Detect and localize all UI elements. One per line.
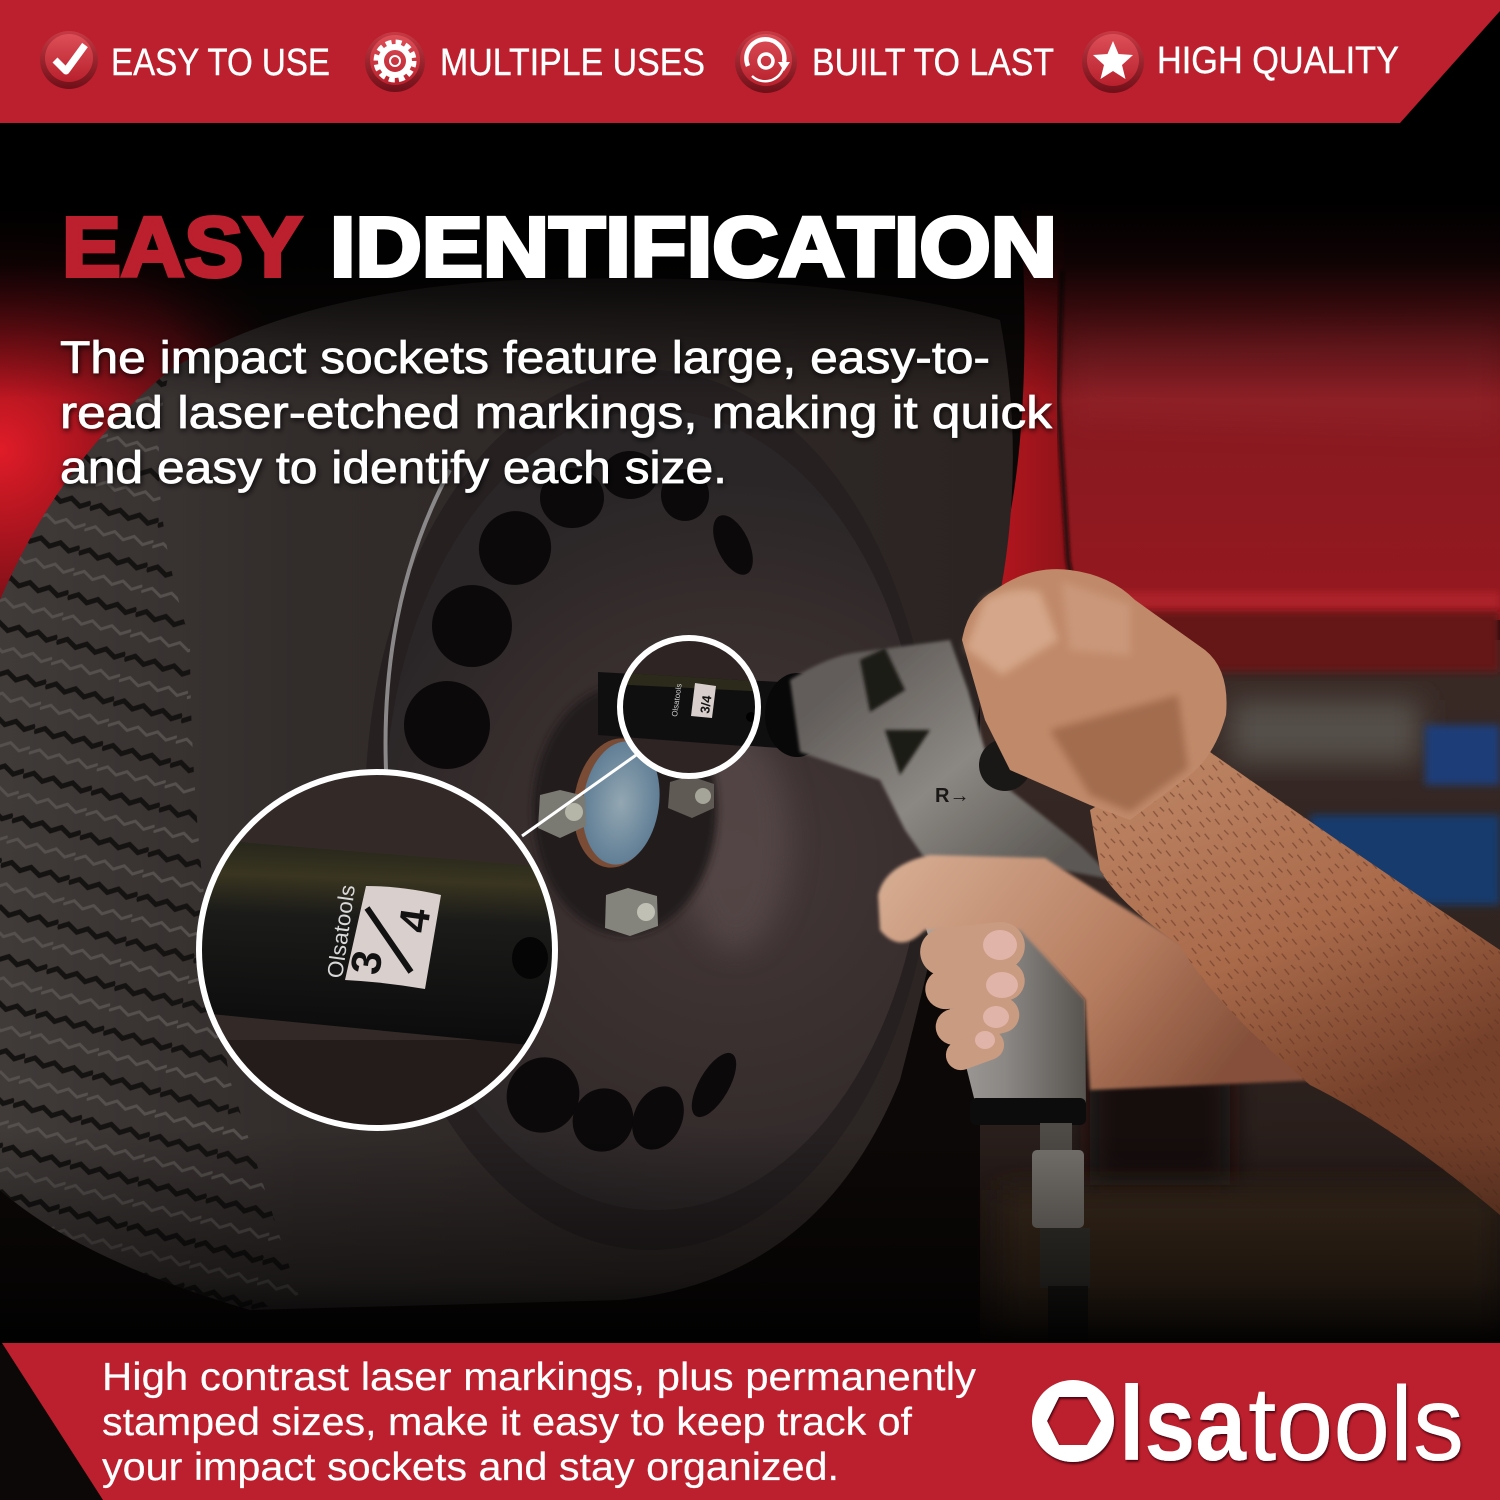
icon: check mark xyxy=(40,31,98,89)
intro paragraph: The impact sockets feature large, easy-to- xyxy=(60,332,990,383)
icon: gear with circular arrow xyxy=(735,31,797,93)
footer text: your impact sockets and stay organized. xyxy=(102,1446,839,1489)
benefit: high quality xyxy=(1082,31,1399,93)
red car body xyxy=(990,200,1500,672)
steel wheel xyxy=(365,370,935,1250)
footer text: stamped sizes, make it easy to keep track of xyxy=(102,1401,912,1444)
large size number 4: 4 xyxy=(389,905,439,935)
large magnifier lens: socket marking xyxy=(196,769,558,1131)
panel: bottom band xyxy=(2,1343,1500,1500)
logo: Olsatools xyxy=(1032,1365,1464,1483)
connector line xyxy=(522,753,639,836)
air fitting xyxy=(1040,1123,1072,1153)
logo: Olsatools: lsa xyxy=(1119,1365,1247,1483)
wrench body xyxy=(790,640,1115,880)
socket on the wheel xyxy=(598,672,780,748)
bottom dark overlay xyxy=(0,1130,1500,1345)
brand label: Olsatools xyxy=(670,683,684,717)
small lens: socket marking xyxy=(610,638,770,776)
lug nuts xyxy=(538,776,714,936)
heading word: identification: IDENTIFICATION xyxy=(330,200,1057,294)
R arrow marking: R→ xyxy=(935,785,969,807)
background: left red fender glow xyxy=(0,150,300,750)
benefit: easy to use xyxy=(40,31,330,89)
background: garage behind the car xyxy=(980,640,1500,1350)
benefit label: EASY TO USE xyxy=(111,42,330,84)
benefit label: MULTIPLE USES xyxy=(440,42,705,84)
size label: 3/4 xyxy=(697,694,715,714)
benefit label: BUILT TO LAST xyxy=(812,42,1054,84)
panel: top benefits band xyxy=(0,0,1500,123)
fingers xyxy=(918,920,1027,1074)
intro paragraph: read laser-etched markings, making it quick xyxy=(60,387,1053,438)
icon: star xyxy=(1082,31,1144,93)
impact wrench xyxy=(598,640,1115,1342)
wheel hub recess xyxy=(533,685,717,935)
benefit label: HIGH QUALITY xyxy=(1157,40,1399,82)
footer text xyxy=(102,1356,977,1489)
intro paragraph xyxy=(60,332,1053,493)
tire tread xyxy=(0,370,300,1310)
socket tube xyxy=(190,838,560,1048)
size marking plate xyxy=(345,886,441,989)
lower arm and gripping hand xyxy=(878,855,1320,1090)
wrench handle xyxy=(925,925,1086,1110)
lens lower area xyxy=(227,1040,524,1125)
footer text: High contrast laser markings, plus permanently xyxy=(102,1356,977,1399)
benefit: built to last xyxy=(735,31,1054,93)
intro paragraph: and easy to identify each size. xyxy=(60,442,727,493)
icon: gear xyxy=(365,32,425,92)
logo: Olsatools: tools xyxy=(1248,1365,1464,1483)
benefit: multiple uses xyxy=(365,32,705,92)
wheel vent holes xyxy=(404,451,761,1162)
fraction slash xyxy=(367,908,411,972)
forearm and upper fist xyxy=(962,569,1500,1215)
wheel dish highlight xyxy=(680,730,790,950)
large size number 3: 3 xyxy=(341,948,391,977)
hub cap xyxy=(565,733,667,873)
wrench nose xyxy=(765,673,829,757)
heading xyxy=(62,200,1057,294)
brand label: Olsatools xyxy=(322,883,360,980)
car tire xyxy=(0,278,1013,1310)
socket side hole xyxy=(512,937,548,979)
top dark overlay xyxy=(0,0,1500,400)
heading word: easy: EASY xyxy=(62,200,302,294)
